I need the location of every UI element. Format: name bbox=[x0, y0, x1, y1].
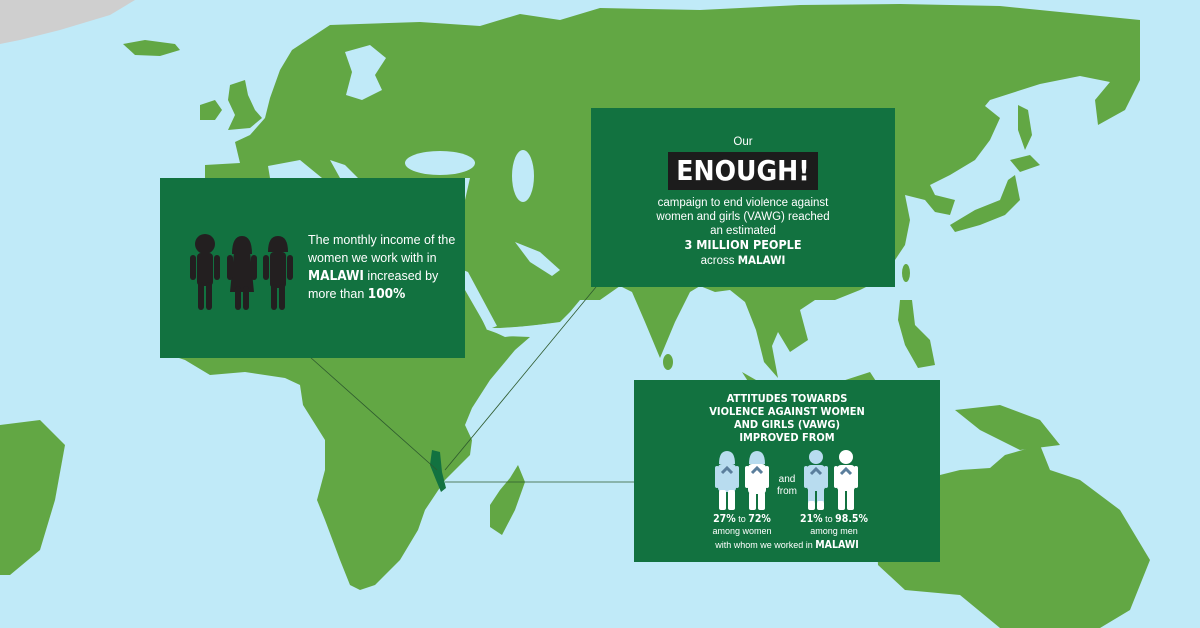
text: women stat: among women bbox=[712, 526, 772, 536]
heading: attitudes: VIOLENCE AGAINST WOMEN bbox=[709, 405, 865, 418]
africa bbox=[160, 180, 530, 590]
taiwan bbox=[902, 264, 910, 282]
panel: income bbox=[160, 178, 465, 358]
sulawesi bbox=[890, 388, 915, 430]
caspian bbox=[512, 150, 534, 202]
madagascar bbox=[490, 465, 525, 535]
sumatra bbox=[742, 372, 805, 432]
icon: women figures bbox=[715, 451, 769, 510]
eurasia bbox=[205, 4, 1140, 378]
text: campaign: across MALAWI bbox=[701, 253, 785, 267]
text: campaign bbox=[656, 197, 830, 267]
mediterranean bits bbox=[268, 160, 322, 178]
panel: attitudes bbox=[634, 380, 940, 562]
text: income statement: The monthly income of the women we work with in MALAWI increased by more than 100% bbox=[308, 233, 455, 302]
text: our: Our bbox=[733, 136, 753, 148]
text: women stat: 27% to 72% bbox=[713, 513, 771, 525]
australia bbox=[875, 445, 1150, 628]
java bbox=[805, 440, 875, 452]
borneo bbox=[830, 372, 885, 425]
text: campaign: campaign to end violence against bbox=[658, 197, 828, 209]
heading: ENOUGH: ENOUGH! bbox=[676, 154, 810, 187]
hokkaido bbox=[1010, 155, 1040, 172]
south america bbox=[0, 420, 65, 575]
sri lanka bbox=[663, 354, 673, 370]
gulf of aden bbox=[490, 323, 555, 337]
iceland bbox=[123, 40, 180, 56]
text: campaign: an estimated bbox=[710, 225, 776, 237]
text: women stat bbox=[712, 513, 772, 536]
uk bbox=[228, 80, 262, 130]
text: men stat bbox=[800, 513, 868, 536]
panel: ENOUGH campaign bbox=[591, 108, 895, 287]
icon: men figures bbox=[804, 450, 858, 510]
new guinea bbox=[955, 405, 1060, 450]
greenland bbox=[0, 0, 135, 44]
sakhalin bbox=[1018, 105, 1032, 150]
text: men stat: among men bbox=[810, 526, 858, 536]
black sea bbox=[405, 151, 475, 175]
ireland bbox=[200, 100, 222, 120]
text: campaign: women and girls (VAWG) reached bbox=[656, 211, 830, 223]
text: footer: with whom we worked in MALAWI bbox=[715, 539, 859, 551]
red sea bbox=[458, 268, 497, 330]
honshu bbox=[950, 175, 1020, 232]
text: men stat: 21% to 98.5% bbox=[800, 513, 868, 525]
malawi bbox=[430, 450, 446, 492]
connector lines bbox=[310, 357, 437, 470]
icon: three women silhouettes bbox=[190, 234, 293, 310]
text: and from: and bbox=[779, 474, 795, 485]
heading: attitudes: ATTITUDES TOWARDS bbox=[727, 392, 847, 405]
persian gulf bbox=[515, 242, 560, 276]
text: campaign: 3 MILLION PEOPLE bbox=[684, 237, 802, 252]
philippines bbox=[898, 300, 935, 368]
heading: attitudes: IMPROVED FROM bbox=[739, 431, 835, 444]
text: and from bbox=[777, 474, 797, 497]
heading: attitudes: AND GIRLS (VAWG) bbox=[734, 418, 840, 431]
text: and from: from bbox=[777, 486, 797, 497]
heading: attitudes bbox=[709, 392, 865, 444]
baltic sea bbox=[345, 45, 386, 100]
